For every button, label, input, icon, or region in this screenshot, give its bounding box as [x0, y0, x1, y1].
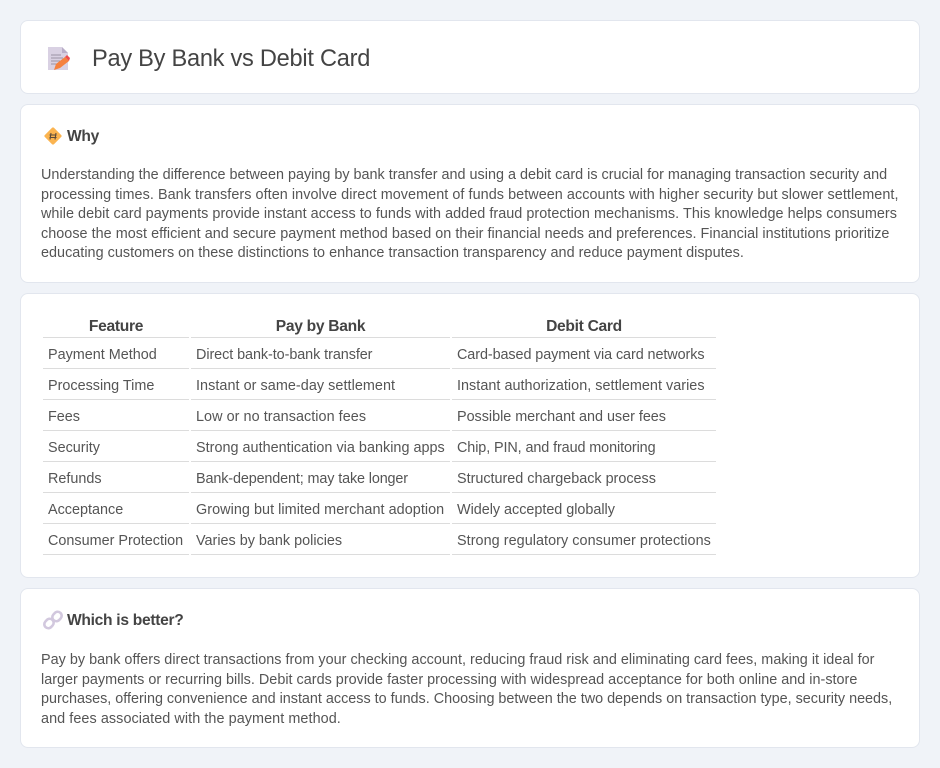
text block: which is better: Pay by bank offers direct transactions from your checking account, reducing fraud risk and eliminating card fees, making it ideal for: [41, 652, 874, 668]
panel: why: [20, 104, 920, 283]
table: comparison: Bank-dependent; may take longer: [196, 471, 408, 487]
table: comparison: Card-based payment via card networks: [457, 347, 704, 363]
text block: why: while debit card payments provide instant access to funds with added fraud protection mechanisms. This knowledge helps consumers: [41, 206, 897, 222]
column header: Feature: Feature: [89, 318, 143, 335]
text block: why: processing times. Bank transfers often involve direct movement of funds between accounts with higher security but slower settlement,: [41, 187, 899, 203]
header panel: [20, 20, 920, 94]
table: comparison: Instant or same-day settlement: [196, 378, 395, 394]
text block: why: [41, 167, 899, 261]
table: comparison: [43, 318, 716, 555]
panel: which is better: [20, 588, 920, 748]
table: comparison: Payment Method: [48, 347, 157, 363]
text block: which is better: [41, 652, 892, 727]
heading: which is better: Which is better?: [67, 612, 184, 629]
icon: memo with pencil: [48, 47, 70, 70]
table: comparison: Growing but limited merchant adoption: [196, 502, 444, 518]
table: comparison: Strong authentication via banking apps: [196, 440, 445, 456]
table: comparison: Chip, PIN, and fraud monitoring: [457, 440, 655, 456]
heading: why: Why: [67, 128, 99, 145]
table: comparison: Refunds: [48, 471, 102, 487]
table: comparison: Widely accepted globally: [457, 502, 615, 518]
text block: which is better: and fees associated with the payment method.: [41, 711, 341, 727]
table: comparison: Low or no transaction fees: [196, 409, 366, 425]
title: Pay By Bank vs Debit Card: [92, 46, 370, 72]
table: comparison: Consumer Protection: [48, 533, 183, 549]
table: comparison: Strong regulatory consumer protections: [457, 533, 711, 549]
column header: Pay by Bank: Pay by Bank: [276, 318, 365, 335]
table: comparison: Varies by bank policies: [196, 533, 342, 549]
column header: Debit Card: Debit Card: [546, 318, 622, 335]
text block: why: educating customers on these distinctions to enhance transaction transparency and reduce payment disputes.: [41, 245, 744, 261]
text block: why: Understanding the difference between paying by bank transfer and using a debit card is crucial for managing transaction security and: [41, 167, 887, 183]
table: comparison: Acceptance: [48, 502, 123, 518]
text block: which is better: purchases, offering convenience and instant access to funds. Choosing between the two depends on transaction type, security needs,: [41, 691, 892, 707]
text block: why: choose the most efficient and secure payment method based on their financial needs and preferences. Financial institutions prioritize: [41, 226, 889, 242]
table: comparison: Instant authorization, settlement varies: [457, 378, 705, 394]
icon: warning diamond: [44, 127, 62, 145]
table: comparison: Processing Time: [48, 378, 154, 394]
table: comparison: Security: [48, 440, 100, 456]
table: comparison: Direct bank-to-bank transfer: [196, 347, 372, 363]
text block: which is better: larger payments or recurring bills. Debit cards provide faster processing with widespread acceptance for both online and in-store: [41, 672, 857, 688]
table: comparison: Structured chargeback process: [457, 471, 656, 487]
panel: comparison table: [20, 293, 920, 578]
icon: link: [43, 610, 63, 630]
table: comparison: Possible merchant and user fees: [457, 409, 666, 425]
table: comparison: Fees: [48, 409, 80, 425]
